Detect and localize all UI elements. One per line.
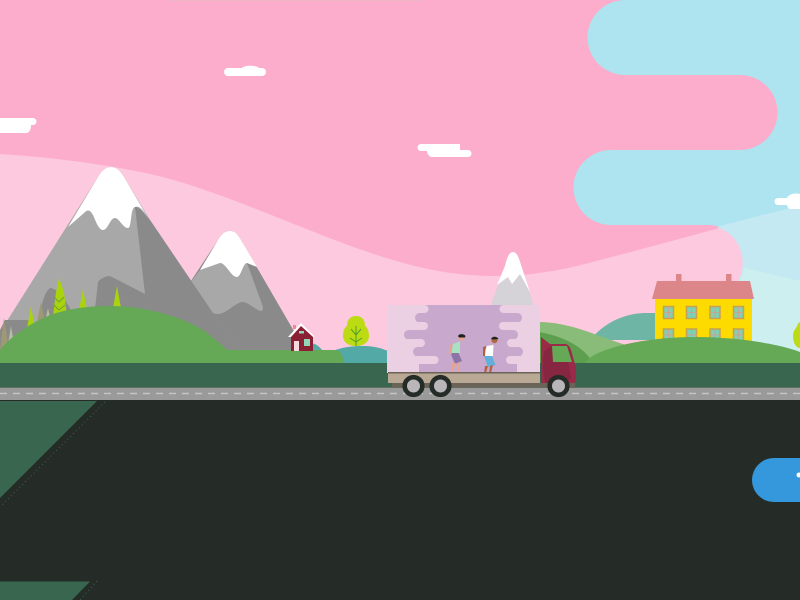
cab shaded panel — [543, 346, 571, 385]
truck box — [387, 305, 540, 373]
road — [0, 387, 800, 400]
right green hill — [585, 337, 800, 363]
figure 1 — [449, 334, 466, 372]
lime tree — [343, 316, 369, 346]
figure 2 — [483, 337, 498, 373]
left foothills — [0, 288, 80, 350]
yellow house — [652, 274, 754, 348]
top edge strip — [169, 0, 424, 1]
green hill by tree — [322, 350, 343, 363]
cab window — [552, 346, 572, 362]
left green hill — [0, 306, 343, 363]
purple centre and wide rows — [404, 305, 523, 373]
right lime tree — [793, 322, 800, 348]
pale notches — [390, 305, 537, 364]
teal hill right — [590, 313, 690, 340]
walls — [655, 298, 752, 348]
pine trees — [0, 278, 121, 350]
blue pill — [752, 458, 800, 502]
teal hill by tree — [330, 346, 392, 363]
cloud 4 — [774, 193, 800, 209]
dotted diagonals — [1, 402, 105, 600]
teal hill behind house — [305, 344, 322, 350]
sky: pale pink foreground curve — [0, 154, 800, 400]
cloud 3 — [418, 144, 472, 157]
window mullions — [663, 306, 744, 341]
truck — [387, 305, 576, 395]
sky: blue rounded band shape — [574, 0, 800, 300]
truck bed — [388, 373, 540, 383]
distant snowy mountain — [489, 252, 535, 310]
roof — [652, 281, 754, 299]
big mountain — [0, 167, 240, 352]
wheels — [405, 377, 567, 395]
windows — [664, 306, 744, 341]
sky: palest blue band at right — [700, 268, 800, 400]
cloud 1 — [224, 66, 266, 76]
small mountain — [180, 231, 305, 352]
light green hill — [538, 322, 630, 363]
red house — [288, 323, 315, 351]
mid green hill — [538, 332, 593, 363]
clouds — [0, 66, 800, 209]
chassis — [392, 383, 575, 388]
box blob pattern — [390, 305, 537, 373]
cab — [541, 337, 576, 385]
dark lower panel — [0, 400, 800, 600]
teal diagonal panel bottom — [0, 582, 90, 600]
chimneys — [676, 274, 732, 282]
cloud 2 — [0, 118, 36, 133]
teal diagonal panel top — [0, 401, 97, 498]
sky: pale blue overlay at right — [708, 206, 800, 400]
dark green ground — [0, 363, 800, 388]
